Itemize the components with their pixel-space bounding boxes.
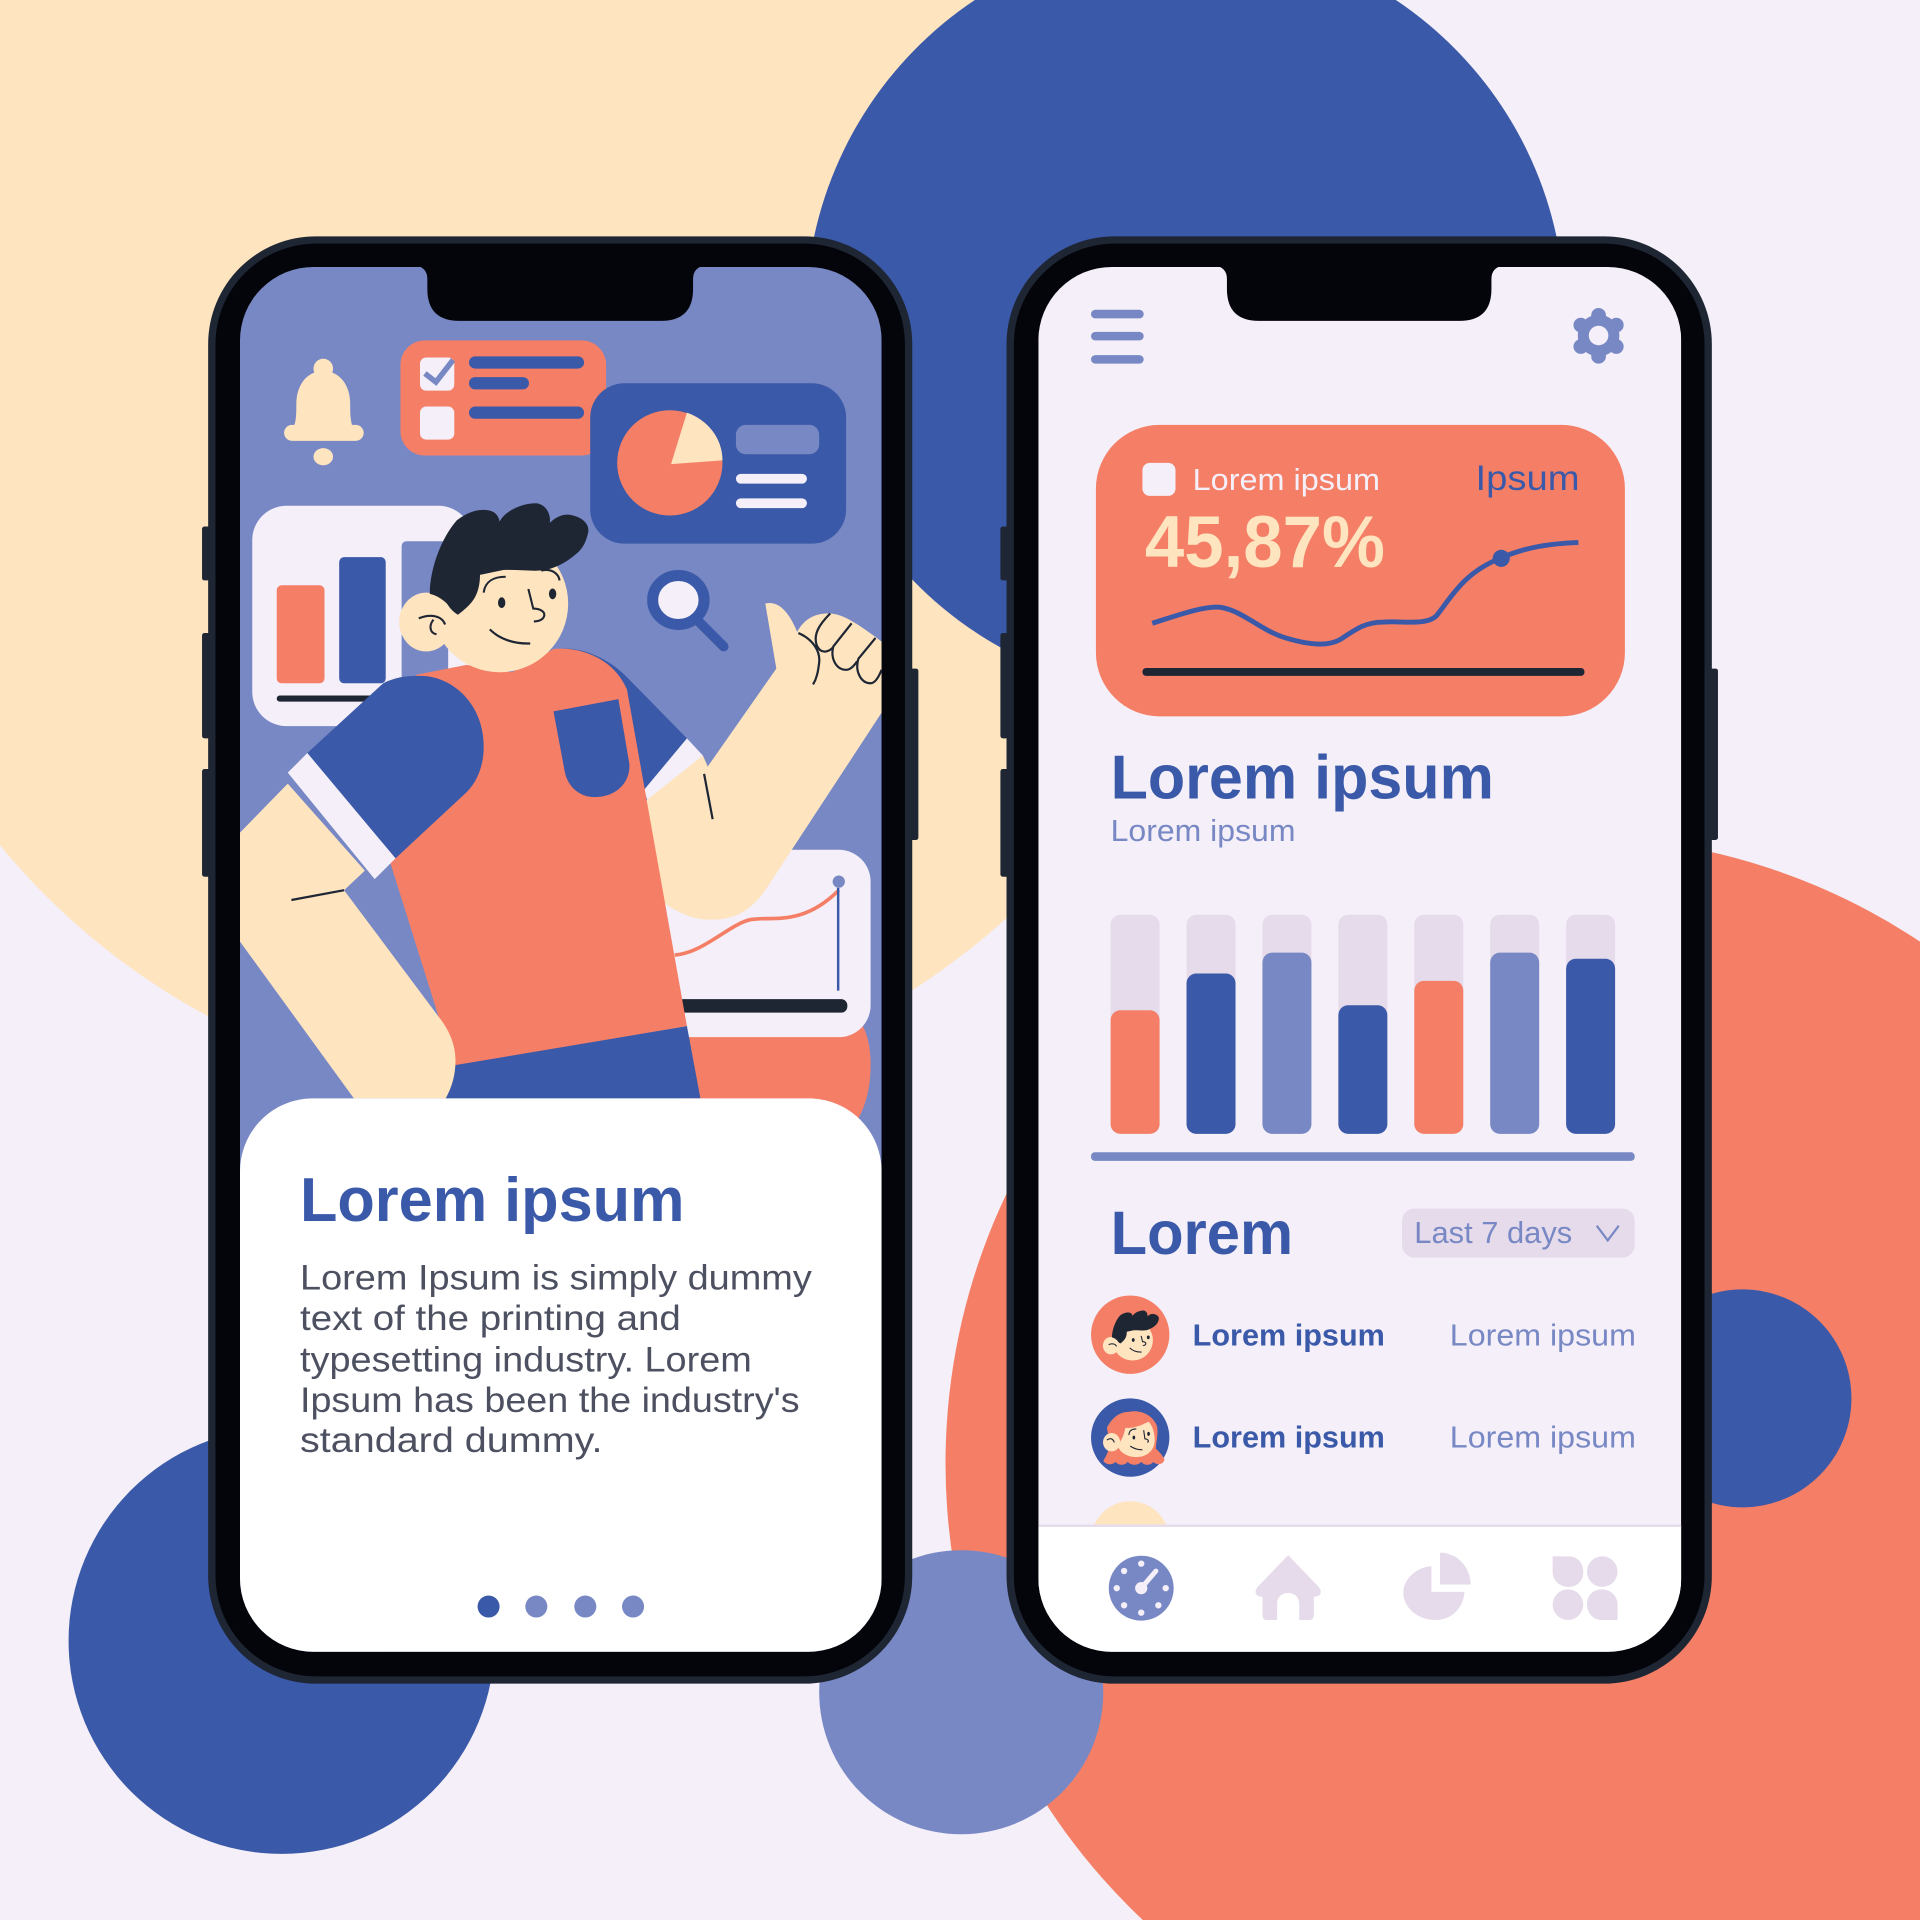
- onboarding text card: [240, 1098, 882, 1652]
- pie chart card: [590, 383, 846, 544]
- card body text: Lorem Ipsum is simply dummy: [300, 1257, 812, 1297]
- list row 1: Lorem ipsum: [1450, 1319, 1636, 1353]
- torso: [388, 649, 687, 1067]
- icon: bell: [284, 359, 364, 465]
- notch right: [1215, 266, 1504, 321]
- card body text: text of the printing and: [300, 1298, 681, 1338]
- icon: pie: [1403, 1553, 1471, 1620]
- checklist card: [400, 340, 606, 456]
- subheading: Lorem ipsum: [1111, 814, 1296, 848]
- list row 1: [1091, 1296, 1636, 1374]
- list row 3 avatar: [1094, 1501, 1166, 1524]
- stat card: Ipsum: [1476, 458, 1580, 498]
- pagination dots: [478, 1596, 644, 1618]
- back sleeve: [558, 649, 687, 796]
- icon: magnifier: [653, 576, 724, 647]
- dropdown: [1402, 1209, 1635, 1258]
- avatar: woman: [1091, 1398, 1169, 1477]
- dashboard screen: [1038, 267, 1681, 1652]
- front sleeve: [307, 676, 484, 858]
- card body text: typesetting industry. Lorem: [300, 1339, 752, 1379]
- bottom navigation: [1038, 1524, 1681, 1652]
- raised arm: [637, 603, 882, 920]
- pocket: [553, 699, 629, 797]
- bent arm: [240, 784, 456, 1098]
- card body text: Ipsum has been the industry's: [300, 1380, 800, 1420]
- avatar: man: [1091, 1296, 1169, 1374]
- stat card: [1096, 425, 1625, 716]
- icon: gear: [1573, 308, 1624, 364]
- icon: apps: [1553, 1556, 1618, 1620]
- stat value: 45,87%: [1145, 500, 1385, 583]
- character: [240, 503, 882, 1098]
- card body text: [300, 1257, 812, 1460]
- phone: dashboard: [1000, 236, 1718, 1684]
- dropdown: Last 7 days: [1414, 1216, 1572, 1250]
- list heading: Lorem: [1111, 1199, 1293, 1267]
- head: [399, 503, 588, 672]
- shorts: [446, 1026, 700, 1098]
- list row 1: Lorem ipsum: [1193, 1319, 1385, 1353]
- stat card: Lorem ipsum: [1193, 463, 1380, 497]
- screen: illustration: [240, 267, 882, 1652]
- line chart card: [637, 850, 871, 1120]
- icon: gauge: [1109, 1556, 1174, 1621]
- card body text: standard dummy.: [300, 1420, 602, 1460]
- card heading: Lorem ipsum: [300, 1165, 684, 1235]
- bar chart card: [252, 506, 473, 726]
- icon: home: [1256, 1555, 1321, 1620]
- stat line chart: [1152, 542, 1578, 644]
- heading: Lorem ipsum: [1111, 742, 1494, 812]
- phone: onboarding: [202, 236, 918, 1684]
- list row 2: Lorem ipsum: [1450, 1420, 1636, 1454]
- phone frame right: [1000, 236, 1718, 1684]
- bar chart: [1091, 915, 1635, 1161]
- icon: menu: [1091, 310, 1144, 364]
- phone frame left: [202, 236, 918, 1684]
- notch left: [415, 266, 705, 321]
- list row 2: Lorem ipsum: [1193, 1420, 1385, 1454]
- list row 2: [1091, 1398, 1636, 1477]
